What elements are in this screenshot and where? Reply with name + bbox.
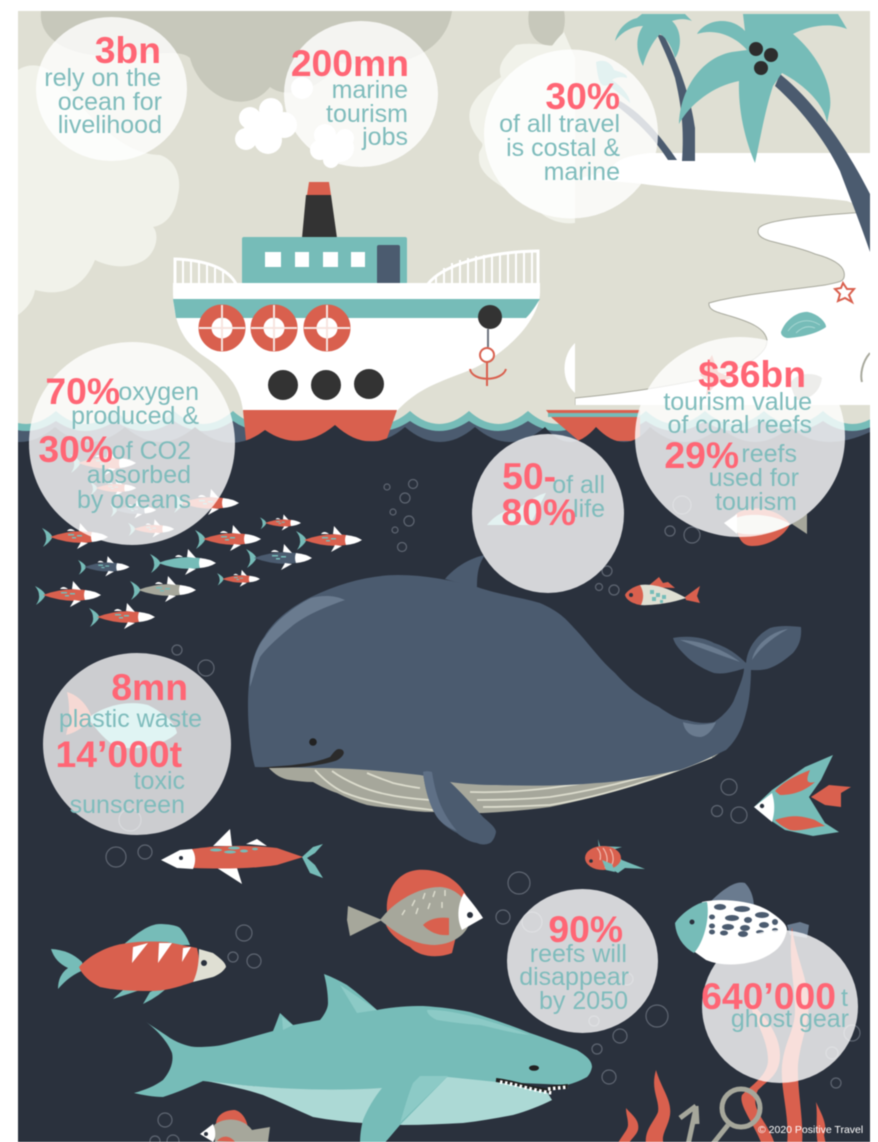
caption: marine (544, 158, 620, 186)
callout: 90% reefs (507, 889, 658, 1033)
figures: 50- (502, 455, 556, 497)
swordfish (161, 829, 323, 884)
callout: coral reefs value (635, 337, 845, 537)
bubble (507, 889, 658, 1033)
callout: 3bn (36, 17, 187, 161)
ship (173, 182, 540, 441)
beach scene overlay (575, 11, 878, 410)
fish school (35, 449, 362, 629)
shark teeth (496, 1080, 568, 1093)
bubble (43, 653, 231, 835)
cabin with windows and door (242, 237, 407, 284)
caption: marine (332, 76, 408, 104)
mouth (258, 749, 344, 768)
small palm trunks (617, 34, 695, 161)
bubble (29, 342, 235, 545)
shark pectoral fin (360, 1076, 448, 1142)
captions: of coral reefs (667, 411, 812, 439)
railings (175, 251, 538, 284)
portholes (268, 369, 384, 400)
captions (663, 388, 812, 516)
captions: sunscreen (70, 791, 185, 819)
captions: absorbed (87, 461, 191, 489)
back waves (17, 410, 871, 444)
callout: ghost gear (701, 930, 858, 1083)
spotted fish (675, 882, 809, 964)
small palm fronds (615, 14, 692, 66)
dorsal fin (445, 555, 485, 588)
caption: of all travel (499, 110, 620, 138)
captions (59, 705, 202, 819)
bubble (472, 434, 624, 593)
captions: by oceans (77, 486, 191, 514)
callout: 50-80% of life (472, 434, 624, 593)
shark (134, 974, 592, 1142)
funnel (302, 182, 337, 238)
lower sand (575, 211, 878, 410)
figure: 90% (548, 908, 623, 950)
captions: of CO2 (112, 437, 191, 465)
figure: $36bn (698, 353, 806, 395)
figures (501, 455, 576, 533)
bubble (284, 21, 438, 167)
seashell (781, 312, 826, 338)
figures: 30% (38, 428, 113, 470)
dark storm cloud (41, 11, 565, 102)
callout: 30% travel (484, 50, 658, 218)
anchor (470, 305, 506, 386)
life rings (205, 311, 344, 345)
caption: by 2050 (539, 987, 628, 1015)
whale (248, 555, 801, 844)
captions: tourism (715, 488, 797, 516)
caption: ocean for (58, 88, 162, 116)
light cloud left (18, 65, 179, 315)
air bubbles (106, 480, 860, 1142)
copyright: © 2020 Positive Travel (758, 1124, 863, 1136)
caption: tourism (326, 100, 408, 128)
red and white fish (625, 577, 700, 605)
captions: toxic (134, 767, 185, 795)
shark body (134, 974, 592, 1097)
caption: reefs will (530, 940, 627, 968)
caption (731, 984, 849, 1033)
seaweed and ghost gear (617, 927, 826, 1142)
captions (552, 471, 605, 523)
caption: jobs (361, 123, 408, 151)
shark belly (207, 1077, 552, 1125)
caption (44, 64, 162, 139)
caption (499, 110, 620, 186)
captions: of all (552, 471, 605, 499)
shark highlights (282, 985, 530, 1035)
eye (309, 738, 317, 746)
figures (38, 370, 120, 470)
red fish with teal fins (51, 924, 226, 1004)
first figure: 8mn (111, 666, 188, 708)
captions (71, 378, 199, 514)
faded fish behind life callout (487, 493, 546, 525)
teal hull stripe (173, 299, 540, 318)
hull (173, 283, 540, 411)
bubble (36, 17, 187, 161)
captions: produced & (71, 402, 199, 430)
caption: ghost gear (731, 1005, 849, 1033)
callout: plastic and sunscreen (43, 653, 231, 835)
rock at edge (861, 353, 870, 382)
flipper (423, 771, 496, 844)
angel fish (754, 755, 851, 836)
figure: 3bn (95, 29, 161, 71)
small red fish (585, 839, 645, 873)
bubble (484, 50, 658, 218)
figures: 70% (45, 370, 120, 412)
belly stripes (315, 752, 714, 810)
coconuts (749, 42, 778, 75)
faded palm fronds (596, 61, 630, 103)
caption (326, 76, 408, 151)
light cloud right (469, 32, 575, 224)
big palm fronds (679, 14, 847, 163)
sea with front wave (0, 425, 878, 1142)
caption: t (841, 984, 848, 1012)
callout: oxygen and CO2 (29, 342, 235, 545)
figure: 200mn (291, 42, 409, 84)
shark eye (529, 1065, 539, 1071)
bubble (702, 930, 858, 1083)
starfish (835, 283, 854, 302)
smoke puffs (235, 77, 354, 168)
figure: 640’000 (701, 975, 836, 1017)
big palm trunk (774, 74, 871, 252)
caption: is costal & (506, 134, 620, 162)
belly (268, 753, 718, 814)
captions: plastic waste (59, 705, 202, 733)
callout: 200mn (284, 21, 438, 167)
captions: tourism value (663, 388, 812, 416)
captions: life (573, 495, 605, 523)
caption: livelihood (58, 111, 162, 139)
second figure: 14’000t (56, 733, 182, 775)
gray fish with red fins (347, 870, 483, 956)
figures: 80% (501, 491, 576, 533)
bubble (635, 337, 845, 537)
captions: used for (709, 464, 799, 492)
flukes (673, 626, 801, 674)
red keel (243, 410, 397, 441)
caption (519, 940, 629, 1015)
captions: reefs (741, 440, 797, 468)
caption: rely on the (44, 64, 161, 92)
second figure: 29% (664, 434, 739, 476)
second boat hull (546, 343, 640, 441)
faded fish behind reef callout (724, 508, 807, 546)
small gray fish (200, 1110, 270, 1142)
tail highlight (683, 722, 716, 737)
body (248, 575, 751, 786)
upper sand (583, 152, 870, 203)
captions: oxygen (118, 378, 199, 406)
head highlight (250, 596, 345, 687)
sky background (18, 11, 870, 441)
figure: 30% (545, 75, 620, 117)
faded starfish and shell (700, 355, 822, 400)
caption: disappear (519, 963, 629, 991)
faded fish behind plastic callout (66, 692, 177, 748)
